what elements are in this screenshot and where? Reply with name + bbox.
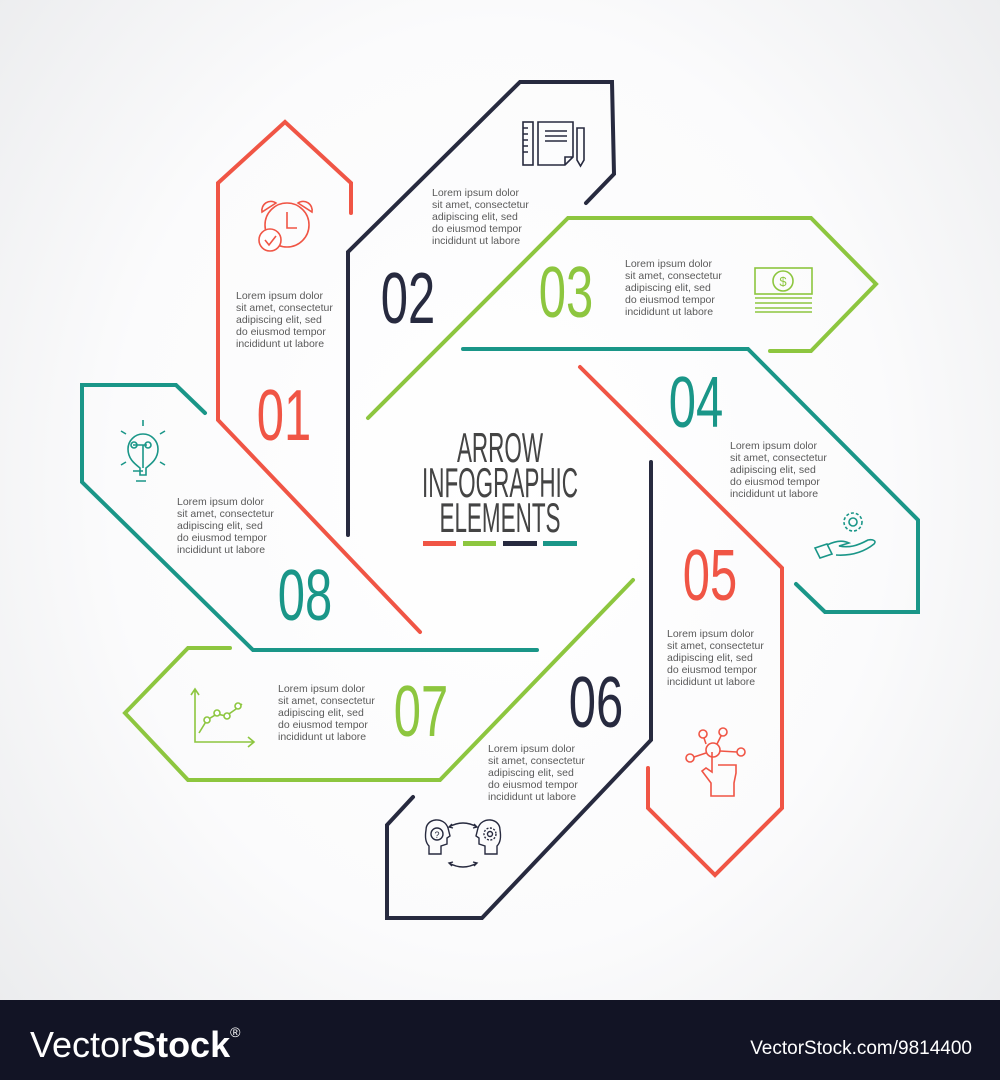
arrow 05 outline xyxy=(580,367,782,875)
number 06: 06 xyxy=(569,663,623,743)
arrow 04 outline xyxy=(463,349,918,612)
text 02: sit amet, consectetur xyxy=(432,199,529,211)
text 06: incididunt ut labore xyxy=(488,791,576,803)
text 08: incididunt ut labore xyxy=(177,544,265,556)
title: ARROW xyxy=(457,426,543,472)
text 02: incididunt ut labore xyxy=(432,235,520,247)
text 08: sit amet, consectetur xyxy=(177,508,274,520)
icon: hand with gear xyxy=(815,513,875,558)
footer bar: VectorStock xyxy=(30,1024,230,1065)
text 01: incididunt ut labore xyxy=(236,338,324,350)
icon: light bulb xyxy=(121,420,165,481)
number 02: 02 xyxy=(381,259,435,339)
text 05: incididunt ut labore xyxy=(667,676,755,688)
text 04: sit amet, consectetur xyxy=(730,452,827,464)
text 04: do eiusmod tempor xyxy=(730,476,820,488)
text 05: sit amet, consectetur xyxy=(667,640,764,652)
icon: touch network xyxy=(686,728,745,796)
text 03: incididunt ut labore xyxy=(625,306,713,318)
arrow 07 outline xyxy=(125,580,633,780)
title: INFOGRAPHIC xyxy=(422,461,578,507)
text 01: adipiscing elit, sed xyxy=(236,314,322,326)
text 01: sit amet, consectetur xyxy=(236,302,333,314)
number 03: 03 xyxy=(539,253,593,333)
text 06: sit amet, consectetur xyxy=(488,755,585,767)
text 07: incididunt ut labore xyxy=(278,731,366,743)
text 05: Lorem ipsum dolor xyxy=(667,628,754,640)
text 06: do eiusmod tempor xyxy=(488,779,578,791)
arrow 02 outline xyxy=(348,82,614,535)
footer bar: VectorStock.com/9814400 xyxy=(750,1038,972,1059)
number 08: 08 xyxy=(278,556,332,636)
icon: alarm clock xyxy=(259,201,312,251)
text 02: adipiscing elit, sed xyxy=(432,211,518,223)
text 05: adipiscing elit, sed xyxy=(667,652,753,664)
arrow 03 outline xyxy=(368,218,876,418)
text 02: do eiusmod tempor xyxy=(432,223,522,235)
text 04: incididunt ut labore xyxy=(730,488,818,500)
text 08: do eiusmod tempor xyxy=(177,532,267,544)
icon: heads exchange xyxy=(425,820,501,867)
icon: heads exchange: ? xyxy=(434,830,440,840)
text 04: Lorem ipsum dolor xyxy=(730,440,817,452)
text 03: adipiscing elit, sed xyxy=(625,282,711,294)
number 04: 04 xyxy=(669,363,723,443)
title xyxy=(422,426,578,542)
text 04: adipiscing elit, sed xyxy=(730,464,816,476)
icon: documents xyxy=(523,122,584,166)
footer bar xyxy=(0,1000,1000,1080)
text 06: Lorem ipsum dolor xyxy=(488,743,575,755)
text 08: Lorem ipsum dolor xyxy=(177,496,264,508)
title color bars xyxy=(423,541,577,546)
text 07: sit amet, consectetur xyxy=(278,695,375,707)
text 07: Lorem ipsum dolor xyxy=(278,683,365,695)
arrow 08 outline xyxy=(82,385,537,650)
text 03: do eiusmod tempor xyxy=(625,294,715,306)
text 05: do eiusmod tempor xyxy=(667,664,757,676)
text 06: adipiscing elit, sed xyxy=(488,767,574,779)
icon: money xyxy=(755,268,812,312)
icon: money: $ xyxy=(779,274,787,289)
text 02: Lorem ipsum dolor xyxy=(432,187,519,199)
text 07: adipiscing elit, sed xyxy=(278,707,364,719)
footer bar: ® xyxy=(230,1024,241,1040)
arrow 01 outline xyxy=(218,122,420,632)
number 05: 05 xyxy=(683,536,737,616)
number 07: 07 xyxy=(394,672,448,752)
text 01: do eiusmod tempor xyxy=(236,326,326,338)
icon: chart xyxy=(191,689,254,747)
arrow 06 outline xyxy=(387,462,651,918)
text 03: Lorem ipsum dolor xyxy=(625,258,712,270)
text 08: adipiscing elit, sed xyxy=(177,520,263,532)
text 03: sit amet, consectetur xyxy=(625,270,722,282)
text 07: do eiusmod tempor xyxy=(278,719,368,731)
text 01: Lorem ipsum dolor xyxy=(236,290,323,302)
number 01: 01 xyxy=(257,376,311,456)
title: ELEMENTS xyxy=(439,496,561,542)
